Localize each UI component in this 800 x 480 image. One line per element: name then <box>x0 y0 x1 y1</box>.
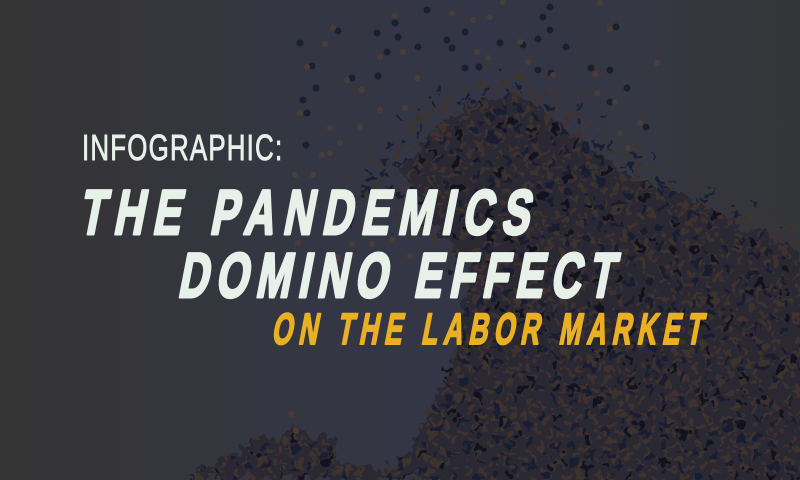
subtitle: on the labor market: ON THE LABOR MARKET <box>269 305 709 354</box>
particle wave <box>186 0 800 480</box>
title line: domino effect: DOMINO EFFECT <box>174 241 623 311</box>
title line: the pandemics: THE PANDEMICS <box>75 178 539 248</box>
heading: infographic label: INFOGRAPHIC: <box>82 128 282 168</box>
scattered dark particles <box>300 7 646 145</box>
scattered brown particles <box>288 2 657 431</box>
